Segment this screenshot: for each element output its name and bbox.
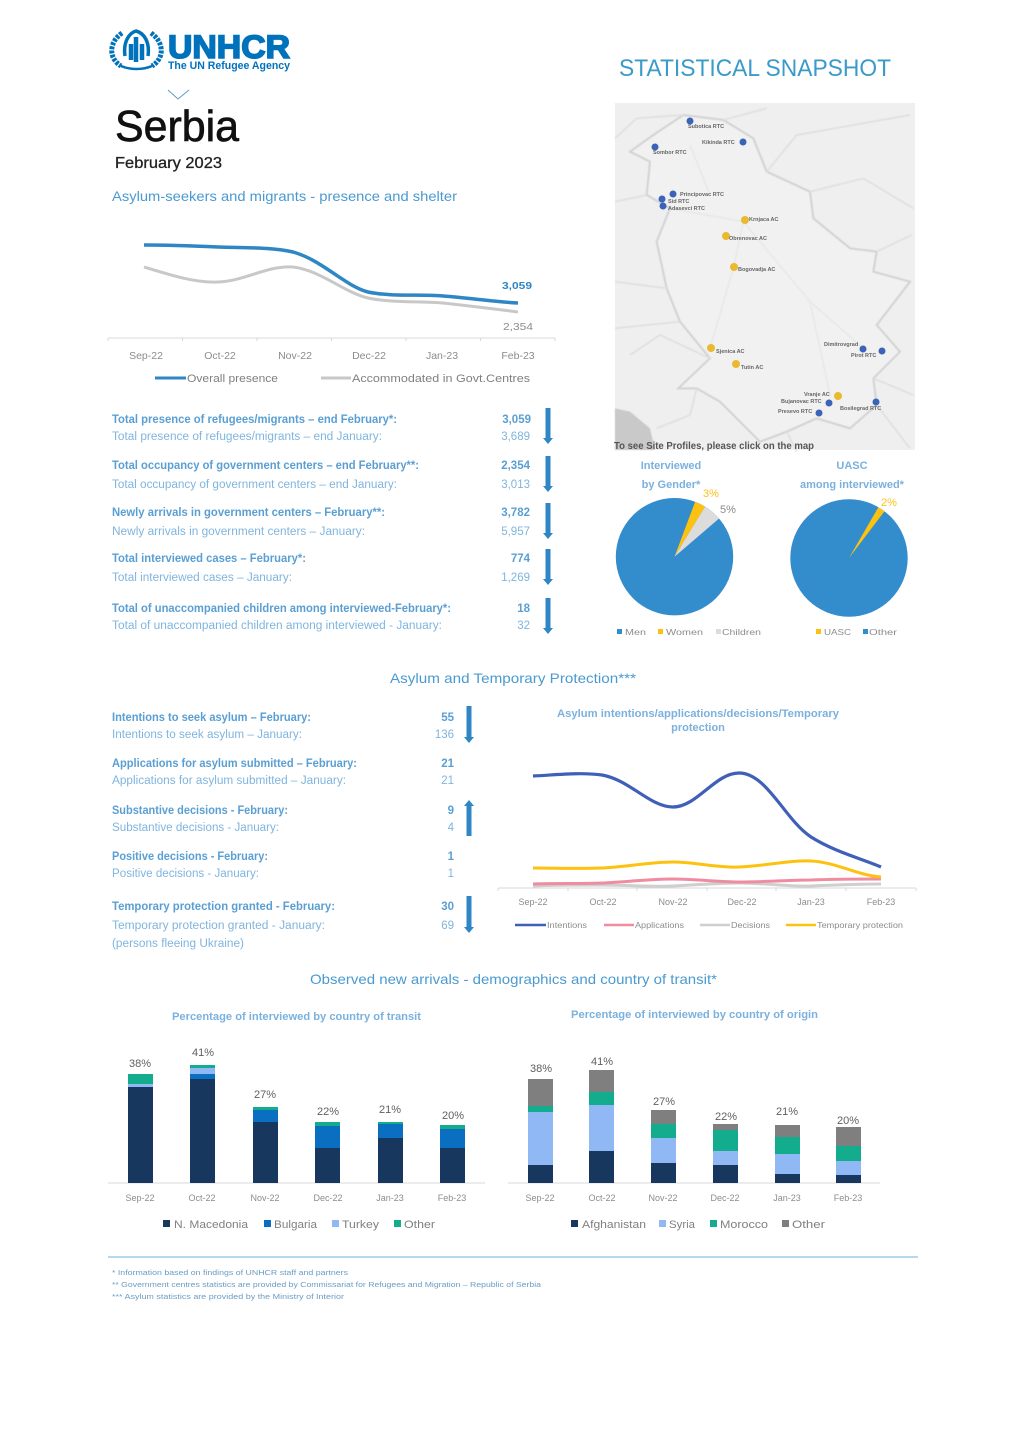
stat: temporary protection: Temporary protection granted - February: xyxy=(112,901,335,913)
legend: Accommodated in Govt.Centres xyxy=(352,373,531,385)
bar value labels: 21% xyxy=(379,1104,401,1116)
x axis labels: Nov-22 xyxy=(250,1193,280,1203)
stat: intentions: Intentions to seek asylum – January: xyxy=(112,729,302,741)
footnotes xyxy=(112,1268,542,1301)
legend: Other xyxy=(792,1219,825,1231)
site labels: Sjenica AC xyxy=(716,349,745,355)
bar value labels: 38% xyxy=(530,1063,552,1075)
x axis labels: Sep-22 xyxy=(125,1193,155,1203)
pie legend: Children xyxy=(722,627,761,637)
stat: total occupancy xyxy=(112,456,553,492)
legend xyxy=(515,920,903,930)
x axis labels: Nov-22 xyxy=(648,1193,678,1203)
x axis labels xyxy=(125,1193,466,1203)
pie legend: Men xyxy=(625,627,646,637)
yellow site markers xyxy=(707,216,842,400)
x axis labels: Jan-23 xyxy=(376,1193,404,1203)
site labels: Bujanovac RTC xyxy=(781,399,822,405)
footnotes: * Information based on findings of UNHCR staff and partners xyxy=(112,1268,348,1277)
legend xyxy=(163,1219,435,1231)
bar value labels: 22% xyxy=(317,1106,339,1118)
pie chart: interviewed by gender: 5% xyxy=(720,504,736,516)
bar value labels: 27% xyxy=(653,1096,675,1108)
stat: substantive decisions: 4 xyxy=(448,822,455,834)
legend: Morocco xyxy=(720,1219,768,1231)
site labels: Vranje AC xyxy=(804,392,830,398)
stat: new arrivals: 3,782 xyxy=(501,507,530,519)
stat: total presence: Total presence of refugees/migrants – end January: xyxy=(112,431,382,443)
bar value labels xyxy=(530,1056,859,1127)
pie title xyxy=(800,460,905,491)
stat: interviewed cases: 1,269 xyxy=(501,572,530,584)
pie chart: interviewed by gender xyxy=(616,460,761,637)
bar chart: country of transit xyxy=(108,1011,485,1231)
stat: substantive decisions xyxy=(112,800,474,836)
stat: unaccompanied children: 18 xyxy=(517,603,531,615)
x axis labels: Feb-23 xyxy=(438,1193,466,1203)
stat: interviewed cases: Total interviewed cases – January: xyxy=(112,572,292,584)
title: statistical snapshot: STATISTICAL SNAPSHOT xyxy=(619,55,891,82)
pie chart: UASC among interviewed: 2% xyxy=(881,497,897,509)
stat: total presence: 3,059 xyxy=(502,414,531,426)
bar value labels: 41% xyxy=(591,1056,613,1068)
x axis labels: Dec-22 xyxy=(352,350,386,362)
bar value labels: 27% xyxy=(254,1089,276,1101)
x axis labels xyxy=(518,897,895,907)
legend: Afghanistan xyxy=(582,1219,646,1231)
stat: total occupancy: Total occupancy of government centers – end January: xyxy=(112,479,397,491)
stat: intentions: 55 xyxy=(441,712,455,724)
stat: substantive decisions: 9 xyxy=(448,805,454,817)
pie legend xyxy=(617,627,761,637)
x axis labels: Sep-22 xyxy=(129,350,163,362)
x axis labels: Sep-22 xyxy=(518,897,548,907)
legend: Overall presence xyxy=(187,373,278,385)
chart title: protection xyxy=(671,722,725,734)
site labels: Krnjaca AC xyxy=(749,217,778,223)
stat: interviewed cases xyxy=(112,549,553,585)
stat: total presence: Total presence of refugees/migrants – end February*: xyxy=(112,414,397,426)
legend: N. Macedonia xyxy=(174,1219,249,1231)
stat: total occupancy: Total occupancy of government centers – end February**: xyxy=(112,460,419,472)
x axis labels: Sep-22 xyxy=(525,1193,555,1203)
legend xyxy=(155,373,531,385)
x axis labels: Oct-22 xyxy=(588,1193,616,1203)
line chart: presence and shelter xyxy=(108,245,555,385)
title: Serbia: Serbia xyxy=(115,102,240,151)
date: February 2023 xyxy=(115,155,222,172)
pie title xyxy=(641,460,701,491)
site labels: Bosilegrad RTC xyxy=(840,406,881,412)
x axis labels: Oct-22 xyxy=(188,1193,216,1203)
site labels: Subotica RTC xyxy=(688,124,724,130)
line: accommodated xyxy=(144,267,518,312)
x axis labels: Nov-22 xyxy=(658,897,688,907)
bar value labels: 41% xyxy=(192,1047,214,1059)
stat: unaccompanied children: Total of unaccompanied children among interviewed-February*: xyxy=(112,603,451,615)
logo tagline: The UN Refugee Agency xyxy=(168,60,291,72)
stat: temporary protection: 30 xyxy=(441,901,454,913)
legend: Other xyxy=(404,1219,435,1231)
site labels xyxy=(653,124,881,415)
stacked bars xyxy=(528,1070,861,1183)
x axis labels: Jan-23 xyxy=(773,1193,801,1203)
site labels: Principovac RTC xyxy=(680,192,724,198)
pie legend: Other xyxy=(869,627,897,637)
pie legend: UASC xyxy=(824,627,851,637)
pie legend: Women xyxy=(666,627,703,637)
site labels: Bogovadja AC xyxy=(738,267,775,273)
chart title xyxy=(557,708,840,734)
blue site markers xyxy=(652,118,886,416)
icon: chevron xyxy=(168,90,189,99)
stat: applications: Applications for asylum submitted – January: xyxy=(112,775,346,787)
site labels: Pirot RTC xyxy=(851,353,876,359)
icon: UNHCR emblem xyxy=(112,31,161,69)
stat: unaccompanied children: 32 xyxy=(517,620,530,632)
site labels: Presevo RTC xyxy=(778,409,812,415)
stat: temporary protection xyxy=(112,896,474,950)
stat: new arrivals: Newly arrivals in government centers – February**: xyxy=(112,507,385,519)
x axis labels: Feb-23 xyxy=(501,350,535,362)
site labels: Dimitrovgrad xyxy=(824,342,858,348)
stat: intentions: 136 xyxy=(435,729,454,741)
pie title: among interviewed* xyxy=(800,479,905,491)
site labels: Adasevci RTC xyxy=(668,206,705,212)
stat: new arrivals: Newly arrivals in government centers – January: xyxy=(112,526,365,538)
x axis labels: Dec-22 xyxy=(710,1193,740,1203)
pie legend xyxy=(816,627,897,637)
line: decisions xyxy=(533,883,881,886)
stat: total occupancy: 3,013 xyxy=(501,479,530,491)
stat: temporary protection: (persons fleeing Ukraine) xyxy=(112,938,244,950)
chart title: Percentage of interviewed by country of transit xyxy=(172,1011,421,1023)
x axis labels: Feb-23 xyxy=(834,1193,862,1203)
legend: Applications xyxy=(635,920,684,930)
bar value labels xyxy=(129,1047,464,1122)
bar chart: country of origin xyxy=(508,1009,880,1231)
x axis labels xyxy=(129,350,535,362)
pie title: UASC xyxy=(836,460,868,472)
pie title: Interviewed xyxy=(641,460,701,472)
legend: Temporary protection xyxy=(817,920,903,930)
stat: interviewed cases: Total interviewed cases – February*: xyxy=(112,553,306,565)
stat: intentions xyxy=(112,706,474,743)
chart title: Percentage of interviewed by country of origin xyxy=(571,1009,818,1021)
logo wordmark: UNHCR xyxy=(168,29,290,65)
footnotes: ** Government centres statistics are provided by Commissariat for Refugees and Migration – Republic of Serbia xyxy=(112,1280,542,1289)
value label: 3,059: 3,059 xyxy=(502,280,532,292)
pie title: by Gender* xyxy=(642,479,701,491)
legend: Intentions xyxy=(547,920,587,930)
stat: positive decisions xyxy=(112,851,455,880)
stat: substantive decisions: Substantive decisions - January: xyxy=(112,822,279,834)
pie chart: UASC among interviewed xyxy=(790,460,908,637)
legend xyxy=(571,1219,825,1231)
map base xyxy=(615,108,913,452)
legend: Syria xyxy=(669,1219,696,1231)
x axis labels xyxy=(525,1193,862,1203)
value label: 2,354: 2,354 xyxy=(503,321,533,333)
pie chart: interviewed by gender: 3% xyxy=(703,488,719,500)
stacked bars xyxy=(128,1065,465,1183)
stats list: asylum xyxy=(112,706,474,950)
stat: positive decisions: Positive decisions - February: xyxy=(112,851,268,863)
x axis labels: Dec-22 xyxy=(727,897,757,907)
map caption: To see Site Profiles, please click on the map xyxy=(614,440,814,452)
line: temporary protection xyxy=(533,861,881,877)
stat: new arrivals xyxy=(112,503,553,539)
stat: temporary protection: Temporary protection granted - January: xyxy=(112,920,325,932)
stat: applications: 21 xyxy=(441,775,454,787)
x axis labels: Jan-23 xyxy=(797,897,825,907)
stat: positive decisions: 1 xyxy=(448,868,454,880)
line: overall presence xyxy=(144,245,518,303)
line chart: asylum intentions, applications, decisions, temporary protection xyxy=(498,708,916,930)
stat: applications xyxy=(112,758,455,787)
legend: Decisions xyxy=(731,920,770,930)
bar value labels: 20% xyxy=(837,1115,859,1127)
legend: Bulgaria xyxy=(274,1219,318,1231)
site labels: Kikinda RTC xyxy=(702,140,735,146)
x axis labels: Dec-22 xyxy=(313,1193,343,1203)
line: intentions xyxy=(533,773,881,867)
x axis labels: Oct-22 xyxy=(589,897,617,907)
stat: intentions: Intentions to seek asylum – February: xyxy=(112,712,311,724)
bar value labels: 22% xyxy=(715,1111,737,1123)
x axis labels: Nov-22 xyxy=(278,350,312,362)
heading: presence and shelter: Asylum-seekers and migrants - presence and shelter xyxy=(112,188,457,204)
stat: total presence xyxy=(112,408,553,444)
stat: new arrivals: 5,957 xyxy=(501,526,530,538)
stat: applications: 21 xyxy=(441,758,455,770)
stat: total occupancy: 2,354 xyxy=(501,460,531,472)
site labels: Obrenovac AC xyxy=(729,236,767,242)
stat: interviewed cases: 774 xyxy=(511,553,531,565)
stat: unaccompanied children: Total of unaccompanied children among interviewed - January: xyxy=(112,620,442,632)
heading: observed new arrivals: Observed new arrivals - demographics and country of transit* xyxy=(310,971,718,987)
UNHCR logo xyxy=(112,29,291,72)
stat: unaccompanied children xyxy=(112,598,553,634)
x axis labels: Feb-23 xyxy=(867,897,895,907)
x axis labels: Jan-23 xyxy=(426,350,458,362)
stat: temporary protection: 69 xyxy=(441,920,454,932)
heading: asylum and temporary protection: Asylum and Temporary Protection*** xyxy=(390,670,637,686)
footnotes: *** Asylum statistics are provided by the Ministry of Interior xyxy=(112,1292,345,1301)
stat: positive decisions: 1 xyxy=(448,851,455,863)
legend: Turkey xyxy=(342,1219,380,1231)
bar value labels: 20% xyxy=(442,1110,464,1122)
line: applications xyxy=(533,879,881,884)
map of sites in Serbia xyxy=(614,103,915,452)
stats list: presence and occupancy xyxy=(112,408,553,634)
stat: applications: Applications for asylum submitted – February: xyxy=(112,758,357,770)
chart title: Asylum intentions/applications/decisions/Temporary xyxy=(557,708,840,720)
site labels: Sombor RTC xyxy=(653,150,687,156)
stat: substantive decisions: Substantive decisions - February: xyxy=(112,805,288,817)
stat: total presence: 3,689 xyxy=(501,431,530,443)
bar value labels: 21% xyxy=(776,1106,798,1118)
stat: positive decisions: Positive decisions - January: xyxy=(112,868,259,880)
bar value labels: 38% xyxy=(129,1058,151,1070)
site labels: Sid RTC xyxy=(668,199,689,205)
site labels: Tutin AC xyxy=(741,365,763,371)
x axis labels: Oct-22 xyxy=(204,350,236,362)
